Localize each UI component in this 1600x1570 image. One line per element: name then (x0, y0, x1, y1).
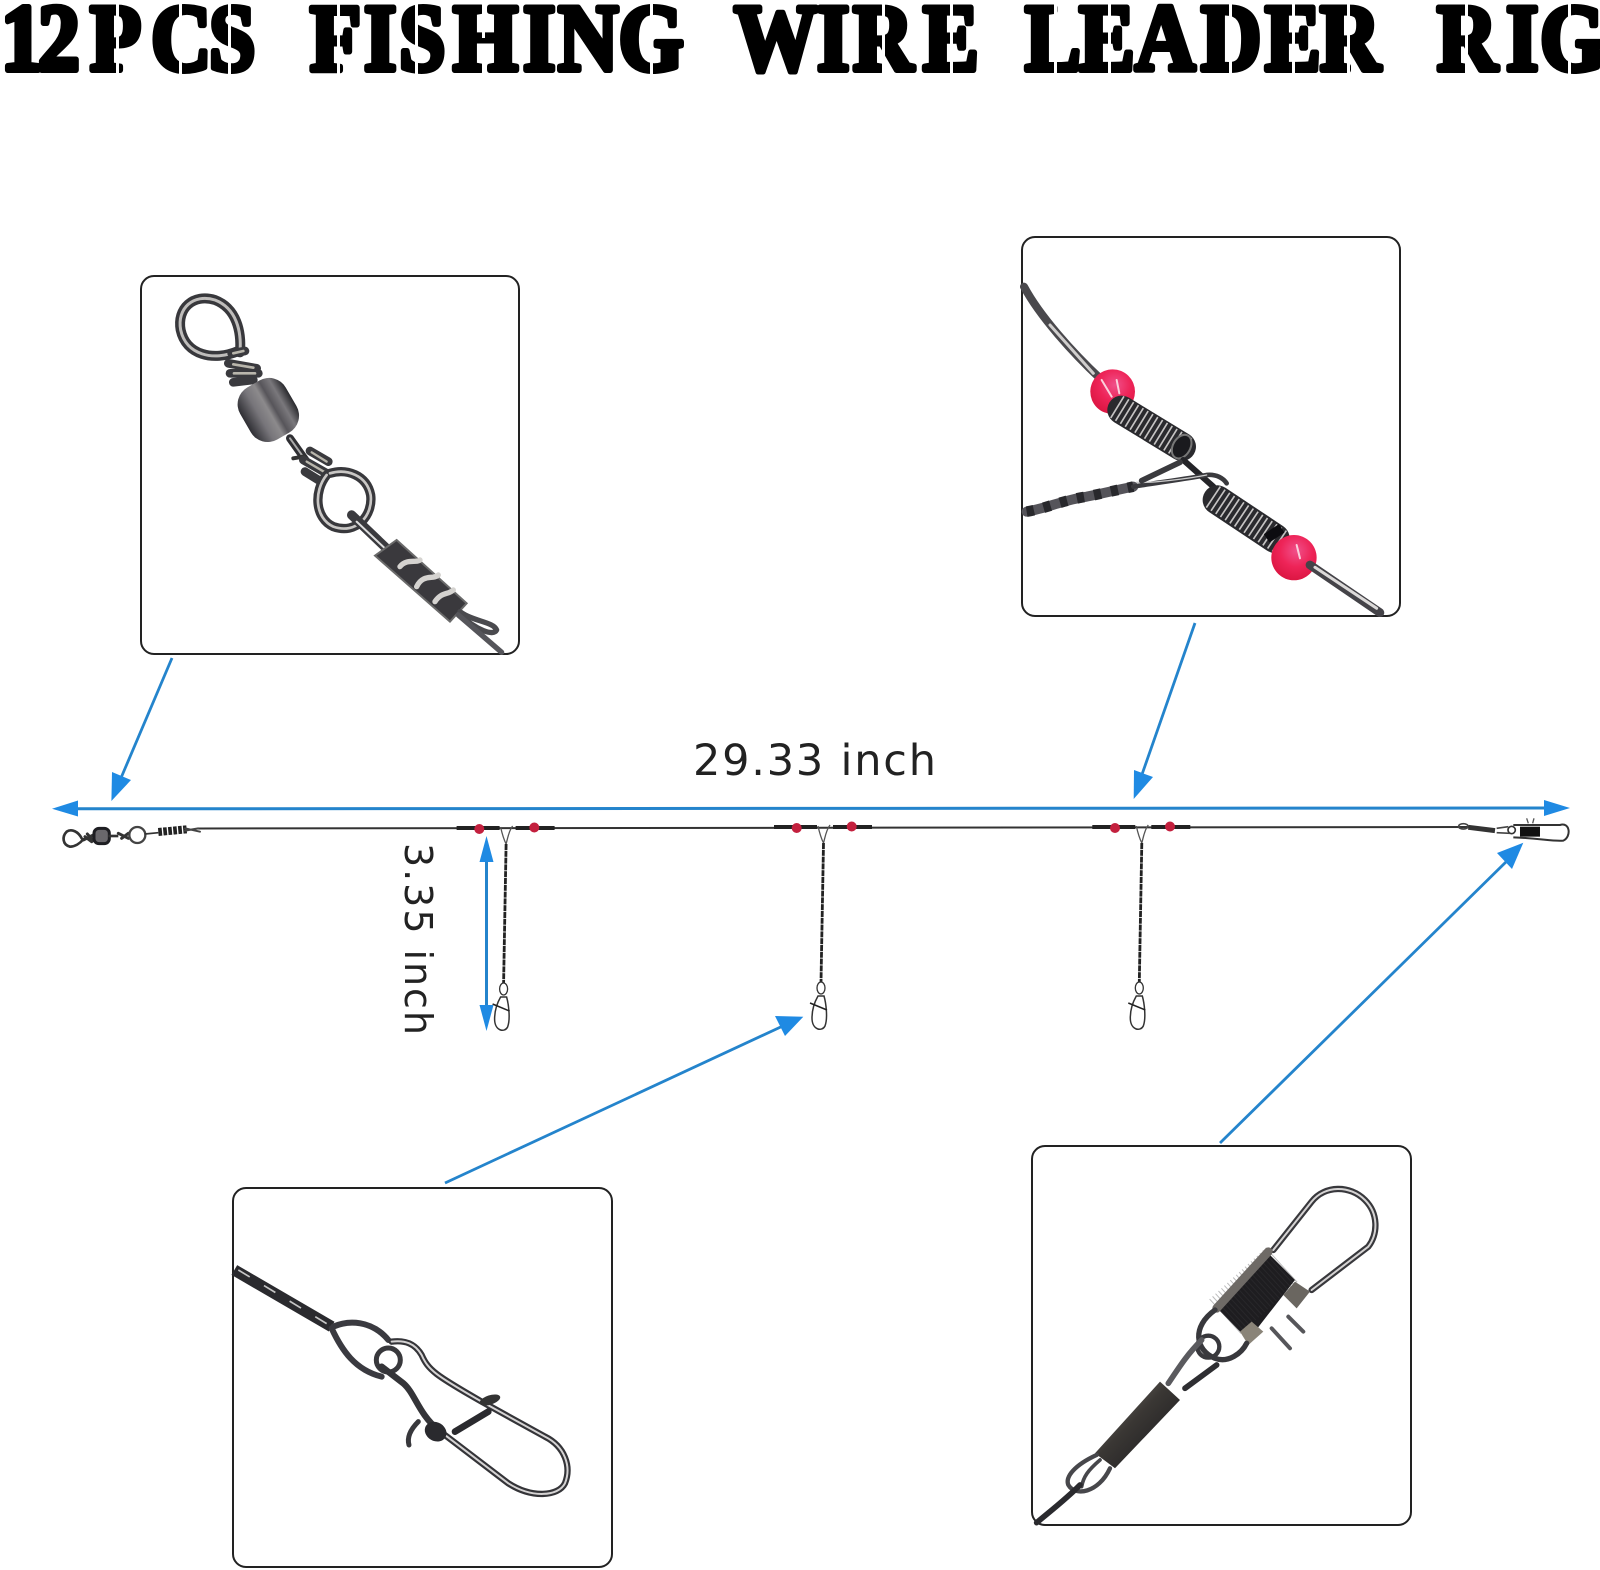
icon: red beads with springs (1024, 287, 1380, 613)
arrow: overall length dimension (52, 800, 1570, 816)
panel: barrel swivel detail (141, 276, 519, 654)
icon: barrel swivel and crimp (180, 298, 502, 652)
panel: end snap with crimp detail (1032, 1146, 1411, 1525)
icon: left swivel (64, 827, 200, 847)
arrow: beads callout (1134, 623, 1195, 799)
panel: beads and spring detail (1022, 237, 1400, 616)
icon: twisted wire and snap (234, 1270, 567, 1494)
main wire (198, 827, 1470, 828)
icon: snap with crimped wire (1037, 1189, 1375, 1523)
dropper 3 (1092, 822, 1190, 1029)
arrow: end snap callout (1220, 843, 1523, 1143)
panel: snap with twisted wire detail (233, 1188, 612, 1567)
arrow: dropper length dimension (480, 836, 494, 1031)
arrow: swivel callout (111, 658, 172, 801)
title (1, 0, 1600, 91)
dropper 1 (457, 822, 555, 1030)
text: dropper length: 3.35 inch (396, 843, 440, 1035)
arrow: snap callout (445, 1016, 803, 1183)
dropper 2 (774, 822, 872, 1029)
text: overall length: 29.33 inch (693, 736, 936, 786)
icon: right end snap (1459, 818, 1569, 841)
